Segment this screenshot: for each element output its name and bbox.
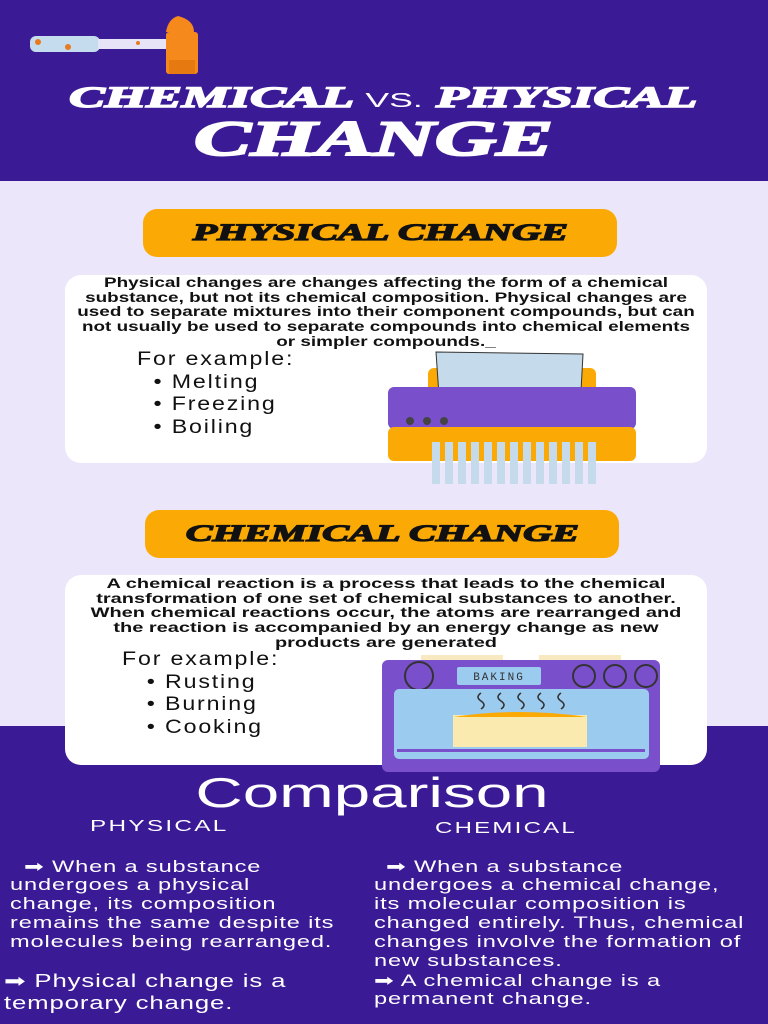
text: chemical comparison: new substances. xyxy=(374,952,563,970)
text: physical examples xyxy=(137,349,294,438)
text: physical comparison: temporary change. xyxy=(4,993,233,1013)
bottom purple band xyxy=(0,726,768,1024)
icon: paper shredder xyxy=(388,352,636,484)
text: physical definition: not usually be used to separate compounds into chemical elements xyxy=(82,319,690,334)
heading: chemical change xyxy=(145,510,619,558)
text: physical comparison: ➡ When a substance xyxy=(24,858,261,876)
heading: physical change xyxy=(143,209,617,257)
text: chemical comparison: changed entirely. Thus, chemical xyxy=(374,914,744,932)
text: physical definition xyxy=(77,275,695,349)
text: physical examples: For example: xyxy=(137,349,294,370)
text: physical comparison: change, its composition xyxy=(10,895,276,913)
text: chemical comparison: its molecular composition is xyxy=(374,895,687,913)
icon: oven xyxy=(382,655,660,772)
panel: chemical change xyxy=(65,575,707,765)
header band xyxy=(0,0,768,181)
title line 1: CHEMICAL VS. PHYSICAL xyxy=(69,81,697,114)
text: chemical comparison: ➡ When a substance xyxy=(386,858,623,876)
text: physical examples: • Boiling xyxy=(154,416,254,438)
panel: physical change xyxy=(65,275,707,463)
text: chemical comparison: permanent change. xyxy=(374,990,592,1008)
text: physical comparison: remains the same despite its xyxy=(10,914,334,932)
text: physical comparison: molecules being rearranged. xyxy=(10,933,332,951)
heading: physical change: PHYSICAL CHANGE xyxy=(192,220,568,245)
subheading: chemical: CHEMICAL xyxy=(435,820,577,837)
text: physical definition: used to separate mixtures into their component compounds, but can xyxy=(77,304,695,319)
text: physical definition: substance, but not its chemical composition. Physical changes are xyxy=(85,290,687,305)
text: chemical comparison: ➡ A chemical change is a xyxy=(374,972,661,990)
text: chemical definition: A chemical reaction is a process that leads to the chemical xyxy=(107,576,665,591)
heading: chemical change: CHEMICAL CHANGE xyxy=(185,521,579,546)
text: chemical examples: • Cooking xyxy=(147,716,263,738)
text: physical definition: or simpler compounds._ xyxy=(276,334,496,349)
text: chemical comparison xyxy=(374,858,744,1008)
text: chemical examples xyxy=(122,649,279,738)
text: chemical definition: products are generated xyxy=(275,635,497,650)
text: physical examples: • Melting xyxy=(154,372,259,392)
subheading: physical: PHYSICAL xyxy=(90,818,229,835)
text: physical comparison: ➡ Physical change is a xyxy=(4,971,286,991)
text: chemical definition xyxy=(90,576,681,650)
title line 2: CHANGE xyxy=(194,110,553,166)
icon: oven: BAKING xyxy=(473,672,525,684)
text: physical definition: Physical changes are changes affecting the form of a chemical xyxy=(104,275,668,290)
text: chemical examples: • Burning xyxy=(147,694,258,715)
text: physical examples: • Freezing xyxy=(154,394,277,415)
text: chemical comparison: changes involve the formation of xyxy=(374,933,741,951)
text: chemical examples: • Rusting xyxy=(147,672,256,692)
text: physical comparison: undergoes a physical xyxy=(10,876,250,894)
text: chemical definition: the reaction is accompanied by an energy change as new xyxy=(113,620,659,635)
heading: comparison: Comparison xyxy=(195,769,549,816)
text: chemical definition: transformation of one set of chemical substances to another. xyxy=(96,591,676,606)
text: chemical comparison: undergoes a chemical change, xyxy=(374,876,719,894)
text: chemical examples: For example: xyxy=(122,649,279,670)
text: physical comparison xyxy=(4,858,334,1013)
icon: hammer xyxy=(30,16,198,74)
text: chemical definition: When chemical reactions occur, the atoms are rearranged and xyxy=(91,605,681,620)
